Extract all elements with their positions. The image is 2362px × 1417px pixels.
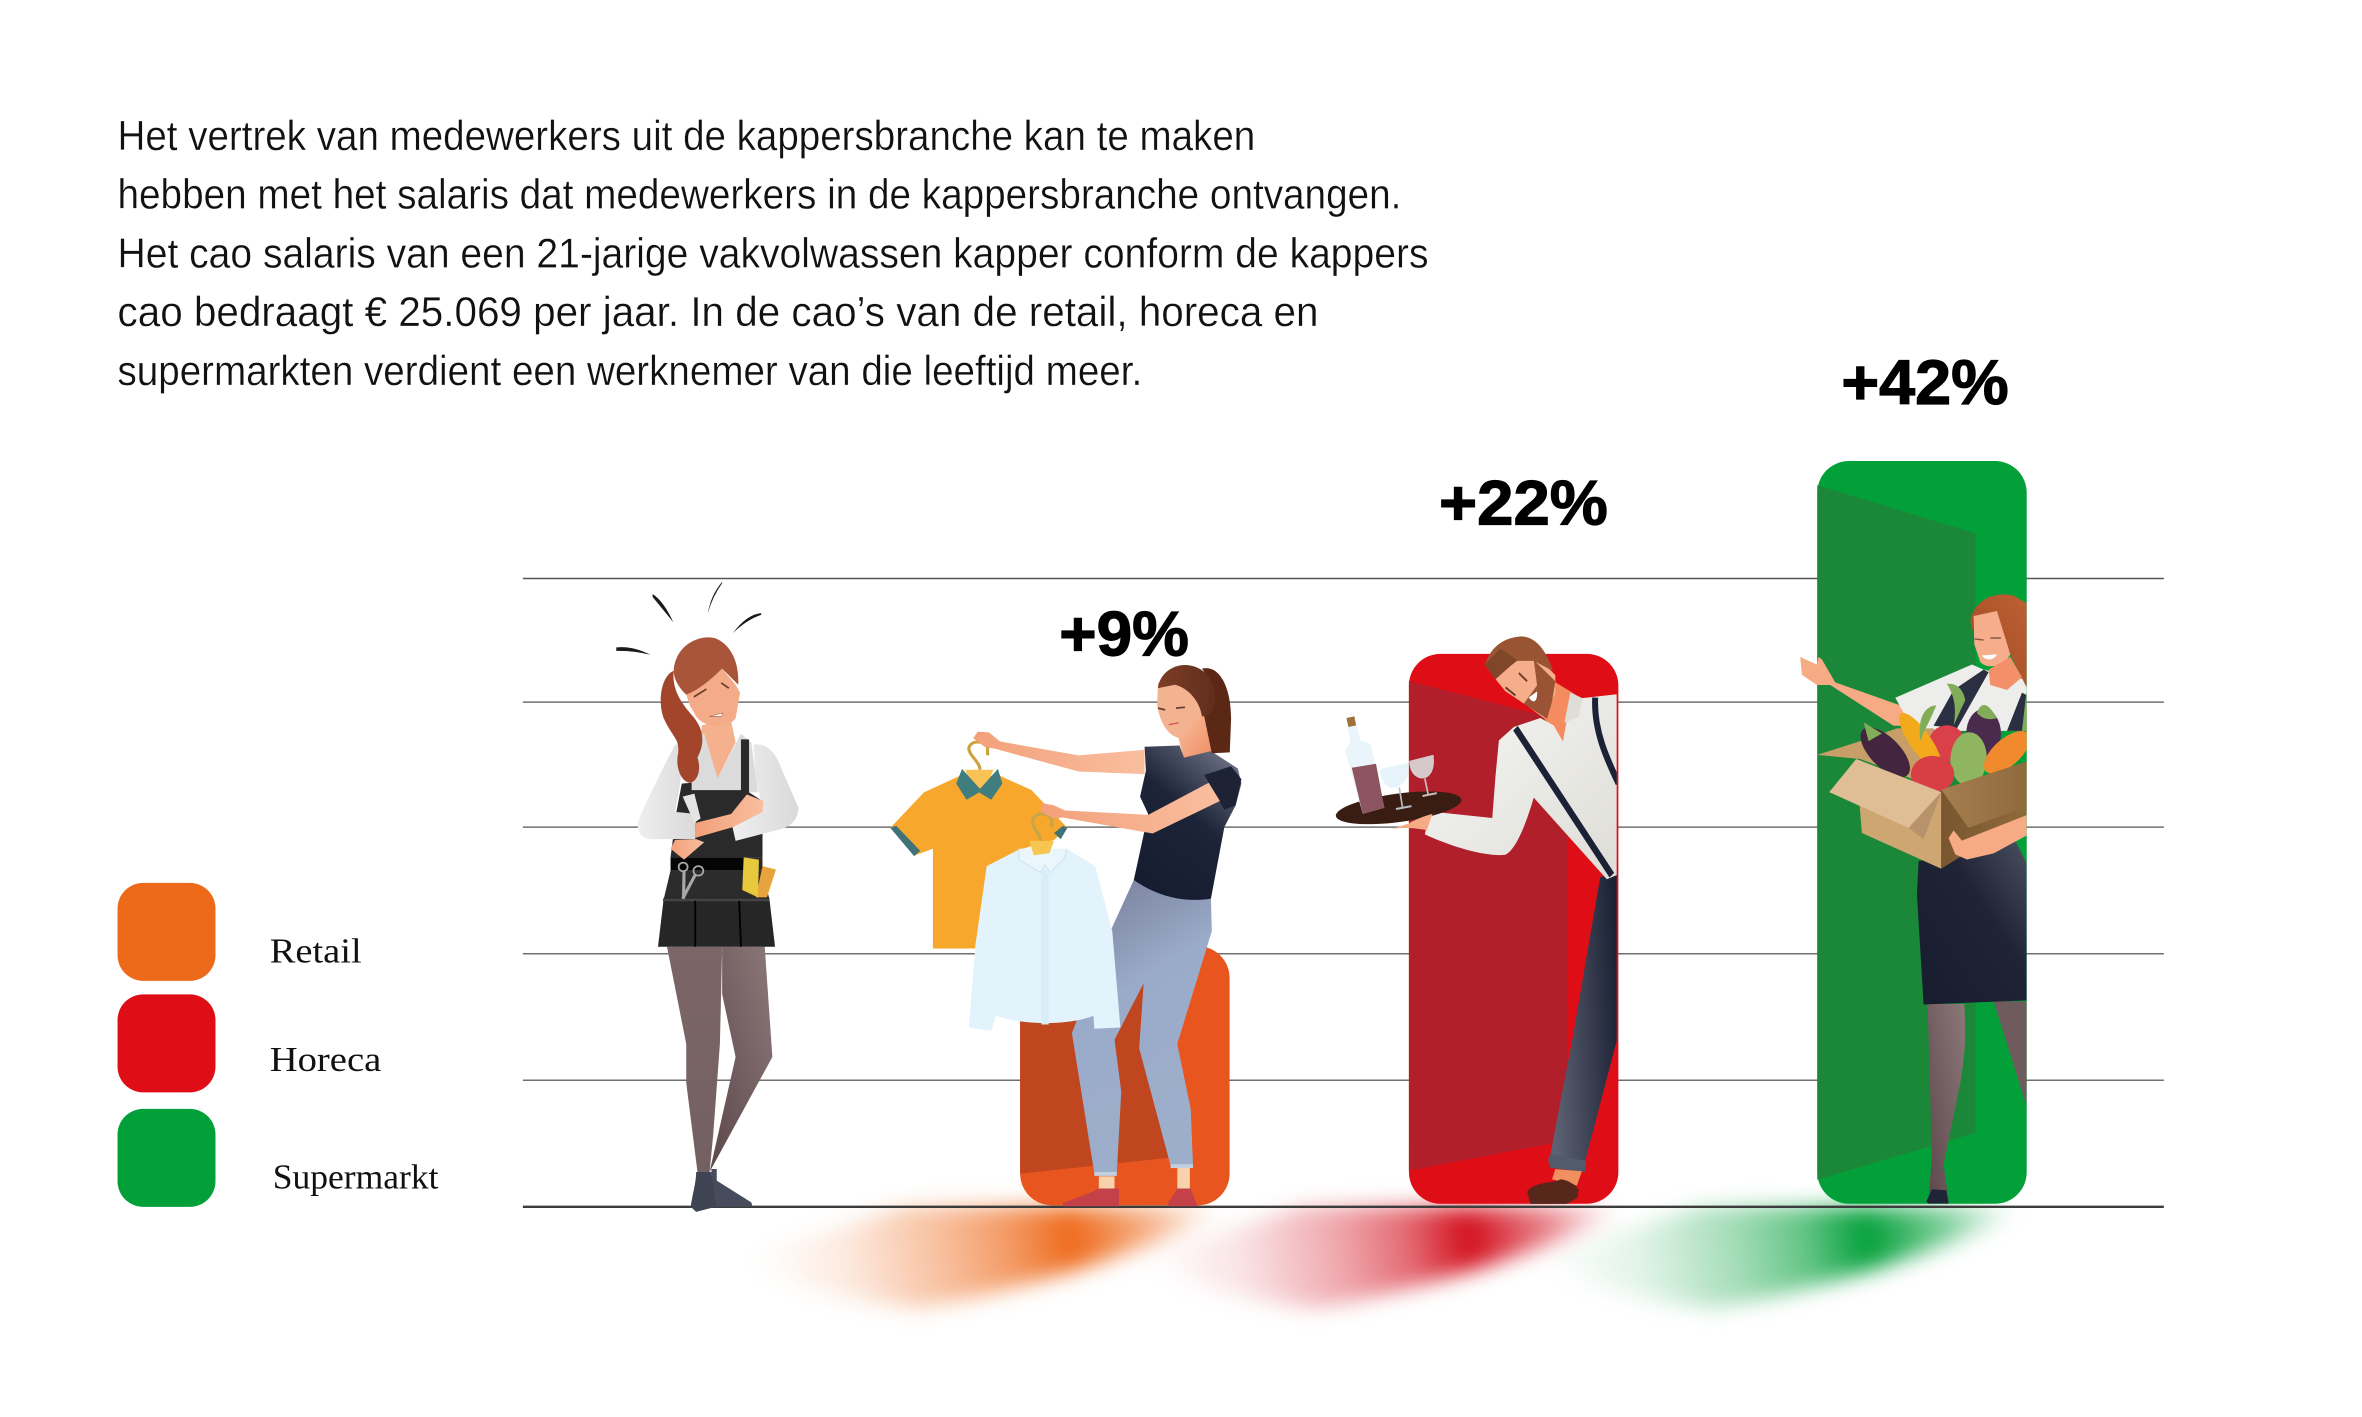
legend: supermarkt: Supermarkt (273, 1159, 439, 1197)
legend: horeca (118, 994, 381, 1092)
shoes (1063, 1188, 1197, 1206)
neck (1177, 710, 1215, 759)
retail worker figure (890, 665, 1241, 1206)
head (1485, 636, 1555, 719)
bar: supermarkt (1817, 461, 2027, 1204)
intro text: supermarkten verdient een werknemer van die leeftijd meer. (118, 347, 1142, 394)
chart grid lines (523, 579, 2164, 1207)
neck (1544, 682, 1578, 742)
trouser cuff (1548, 1154, 1586, 1172)
neck and blouse (677, 721, 758, 792)
intro text: cao bedraagt € 25.069 per jaar. In de cao’s van de retail, horeca en (118, 288, 1319, 335)
box back flap (1818, 728, 1934, 779)
shoe (1527, 1179, 1579, 1204)
jeans (1072, 880, 1212, 1173)
t-shirt (1134, 745, 1241, 900)
tray (1336, 792, 1462, 824)
bar: horeca (1409, 654, 1618, 1204)
apron (658, 739, 775, 947)
box (1829, 759, 2027, 869)
apron straps (1934, 670, 2027, 731)
legs (667, 947, 772, 1172)
suspenders (1515, 698, 1618, 875)
face and hair (1157, 665, 1231, 753)
smile (1982, 654, 1997, 659)
figures: hairdresser and retail worker (616, 582, 1241, 1212)
legs (1928, 1001, 2027, 1201)
ankles and cuffs (1094, 1164, 1193, 1190)
value: +42%: +42% (1841, 348, 2009, 418)
sleeve (1204, 766, 1241, 810)
figure: supermarket worker (1800, 594, 2034, 1204)
bottle (1345, 716, 1384, 814)
wine glasses (1380, 755, 1437, 809)
bar: retail (1020, 946, 1230, 1205)
figure: waiter (1335, 636, 1618, 1204)
legend: supermarkt (118, 1109, 439, 1207)
hair (1970, 594, 2027, 688)
combs (742, 857, 776, 897)
arm holding box (1949, 815, 2027, 860)
trousers (1550, 873, 1617, 1161)
scissors (679, 863, 703, 899)
stress marks (616, 582, 761, 655)
value: +9%: +9% (1059, 599, 1189, 669)
sleeves (638, 744, 798, 841)
eyes (1975, 638, 2001, 640)
legend: horeca: Horeca (270, 1041, 381, 1079)
face (1974, 611, 2010, 666)
shirt (1425, 694, 1617, 879)
hand (1388, 814, 1432, 830)
legend: retail (118, 883, 362, 981)
intro text: hebben met het salaris dat medewerkers in de kappersbranche ontvangen. (118, 171, 1401, 218)
arms (973, 732, 1220, 834)
neck (1989, 657, 2022, 690)
collar (1564, 693, 1583, 723)
boots (691, 1169, 753, 1212)
intro text (118, 112, 1429, 394)
polo shirt (890, 742, 1067, 949)
raised arm (1800, 657, 1910, 726)
intro text: Het cao salaris van een 21-jarige vakvolwassen kapper conform de kappers (118, 229, 1429, 276)
floor shadows (746, 1207, 2024, 1308)
legend (118, 883, 439, 1207)
towel (683, 794, 701, 823)
ankle (1552, 1169, 1582, 1185)
blouse (1895, 665, 2027, 731)
shoe (1926, 1189, 1949, 1204)
vegetables (1856, 684, 2034, 794)
legend: retail: Retail (270, 933, 362, 971)
white shirt (969, 814, 1120, 1031)
intro text: Het vertrek van medewerkers uit de kappersbranche kan te maken (118, 112, 1255, 159)
head (661, 637, 740, 783)
skirt (1917, 841, 2027, 1004)
crossed forearms (671, 794, 763, 860)
hairdresser figure (616, 582, 798, 1212)
value: +22%: +22% (1439, 468, 1608, 538)
